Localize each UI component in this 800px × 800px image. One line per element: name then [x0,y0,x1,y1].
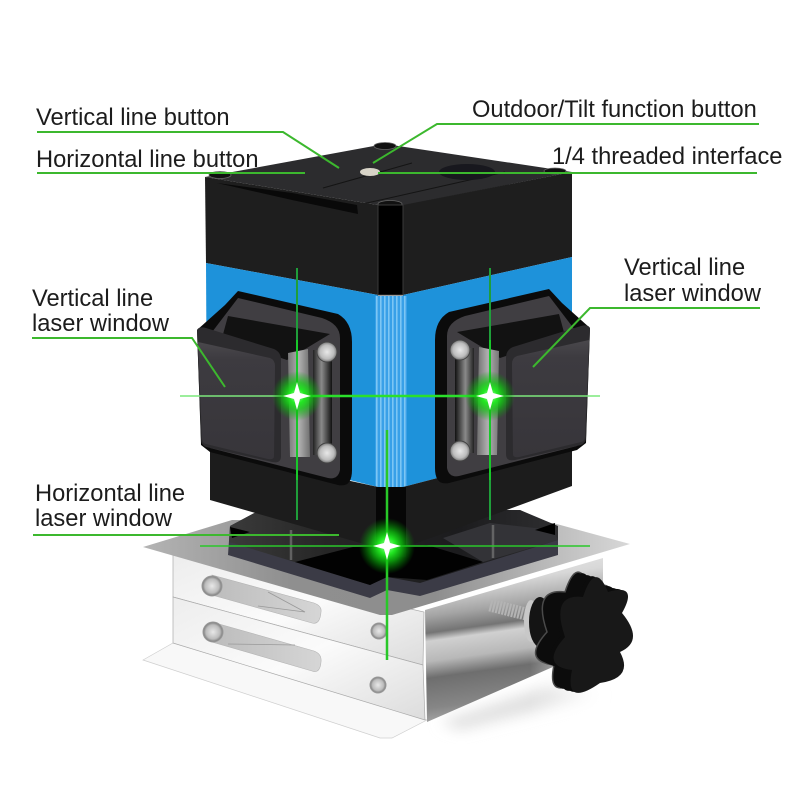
glass strip [477,347,499,455]
upper screw [450,340,470,360]
corner post lower [376,487,406,557]
corner post upper [378,205,403,295]
bottom vertical beam [386,430,388,660]
left side panel lower [173,597,425,720]
lower slot reflection [228,644,295,645]
right laser window module [435,289,590,483]
washer [524,600,538,642]
bezel [197,291,352,485]
mount notches [230,523,555,538]
mount centre black [295,545,483,585]
knob face [554,577,633,693]
leader: horizontal line button [37,172,305,174]
label: horizontal line laser window: Horizontal line [35,481,185,507]
table drop shadow [440,685,600,730]
right side fade [530,600,610,725]
lift table base [143,510,630,738]
right vertical beam [489,268,491,520]
housing [447,296,581,476]
left vertical beam [296,268,298,520]
mount right reflection [443,523,558,562]
screws on side panel [202,576,387,693]
dark mounting plate edge [228,510,558,598]
label: vertical line button: Vertical line button [36,105,230,131]
label: right vertical line laser window: Vertical line [624,255,745,281]
leader: horizontal window [33,534,339,536]
leader: outdoor tilt button [373,124,759,163]
top face [205,144,572,205]
laser beams [180,268,600,660]
leader: vertical line button [37,132,339,168]
label: right vertical line laser window: laser window [624,281,762,307]
bright vertical beam segments [297,340,490,480]
left laser glow [272,371,322,421]
glass strip [288,349,310,457]
square cover face [198,342,275,459]
left lower black face [210,450,378,548]
leader: right vertical window [533,308,760,367]
right laser glow [465,371,515,421]
square cover frame [506,325,590,460]
upper screw [317,342,337,362]
right inner side of table [425,558,603,722]
right upper black face [403,172,572,295]
square cover frame [197,327,281,462]
housing [206,298,340,478]
mount reflection streaks [291,525,493,560]
leader lines [32,124,760,535]
left side panel upper [173,555,424,665]
corner screws [209,142,566,208]
upper slot [212,575,321,623]
left laser window module [197,291,352,485]
label: outdoor tilt function button: Outdoor/Tilt function button [472,97,757,123]
left blue band [206,263,378,487]
lower screw [317,443,337,463]
top plate [143,520,630,615]
top face grooves [323,163,505,205]
ribbed corner strip [375,296,407,487]
housing recess [222,316,330,360]
label: horizontal line button: Horizontal line button [36,147,259,173]
upper slot reflection [258,592,305,612]
label: threaded interface: 1/4 threaded interface [552,144,782,170]
bottom laser glow [359,518,415,574]
threaded hole [439,164,495,180]
label: left vertical line laser window: laser window [32,311,170,337]
knob side lobes [536,572,629,692]
bottom flange [143,643,427,738]
mount top surface [229,510,558,585]
lower slot [212,622,321,672]
right blue band [403,257,572,487]
silver button [360,168,380,176]
laser level body [205,142,572,557]
bezel [435,289,590,483]
housing recess [457,314,565,358]
faint horizontal extents [180,395,600,397]
threaded screw [490,605,526,614]
rail [313,350,332,455]
label: left vertical line laser window: Vertical line [32,286,153,312]
knob and threaded screw [490,572,633,693]
rail [455,348,474,453]
leader: threaded interface [378,172,757,174]
right lower black face [403,443,572,548]
bright horizontal beam [297,395,490,397]
label: horizontal line laser window: laser window [35,506,173,532]
lower screw [450,441,470,461]
left upper black face [205,177,378,295]
edge slot [217,183,358,214]
collar [529,597,551,647]
leader: left vertical window [32,338,225,387]
square cover face [512,340,589,457]
bottom horizontal beam [200,545,590,547]
